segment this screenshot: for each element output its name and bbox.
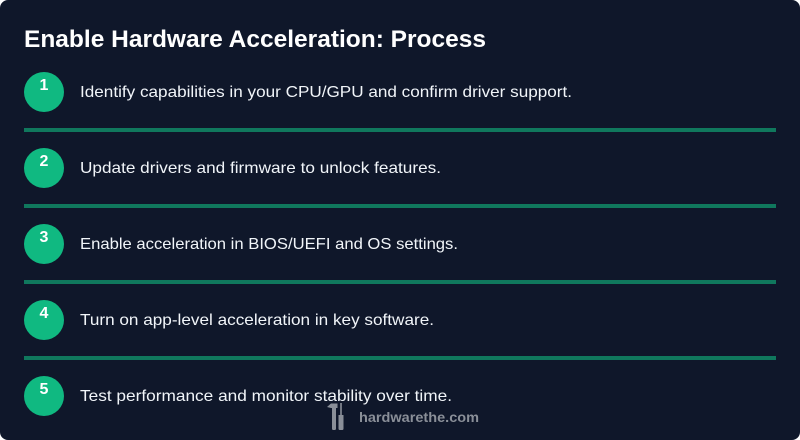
- step 2: [24, 148, 441, 188]
- step 1 text: Identify capabilities in your CPU/GPU and confirm driver support.: [80, 84, 572, 101]
- step 5 text: Test performance and monitor stability over time.: [80, 388, 452, 405]
- step 3 badge: [24, 224, 64, 264]
- icon: screwdriver: [338, 403, 344, 430]
- step 4 badge: 4: [40, 305, 49, 322]
- icon: hammer and screwdriver: [327, 403, 344, 430]
- divider 3: [24, 280, 776, 284]
- divider 4: [24, 356, 776, 360]
- step 1 badge: [24, 72, 64, 112]
- watermark text: hardwarethe.com: [359, 409, 479, 425]
- step 3 text: Enable acceleration in BIOS/UEFI and OS settings.: [80, 236, 458, 253]
- step 4: [24, 300, 434, 340]
- step 4 badge: [24, 300, 64, 340]
- step 3: [24, 224, 458, 264]
- step 5 badge: [24, 376, 64, 416]
- step 3 badge: 3: [40, 229, 49, 246]
- step 5 badge: 5: [40, 381, 49, 398]
- step 2 badge: [24, 148, 64, 188]
- title: Enable Hardware Acceleration: Process: [24, 26, 486, 53]
- icon: hammer: [327, 404, 338, 430]
- step 2 text: Update drivers and firmware to unlock features.: [80, 160, 441, 177]
- step 5: [24, 376, 452, 416]
- step 1 badge: 1: [40, 77, 49, 94]
- step 2 badge: 2: [40, 153, 49, 170]
- step 1: [24, 72, 572, 112]
- step 4 text: Turn on app-level acceleration in key software.: [80, 312, 434, 329]
- divider 2: [24, 204, 776, 208]
- watermark: [327, 403, 479, 430]
- divider 1: [24, 128, 776, 132]
